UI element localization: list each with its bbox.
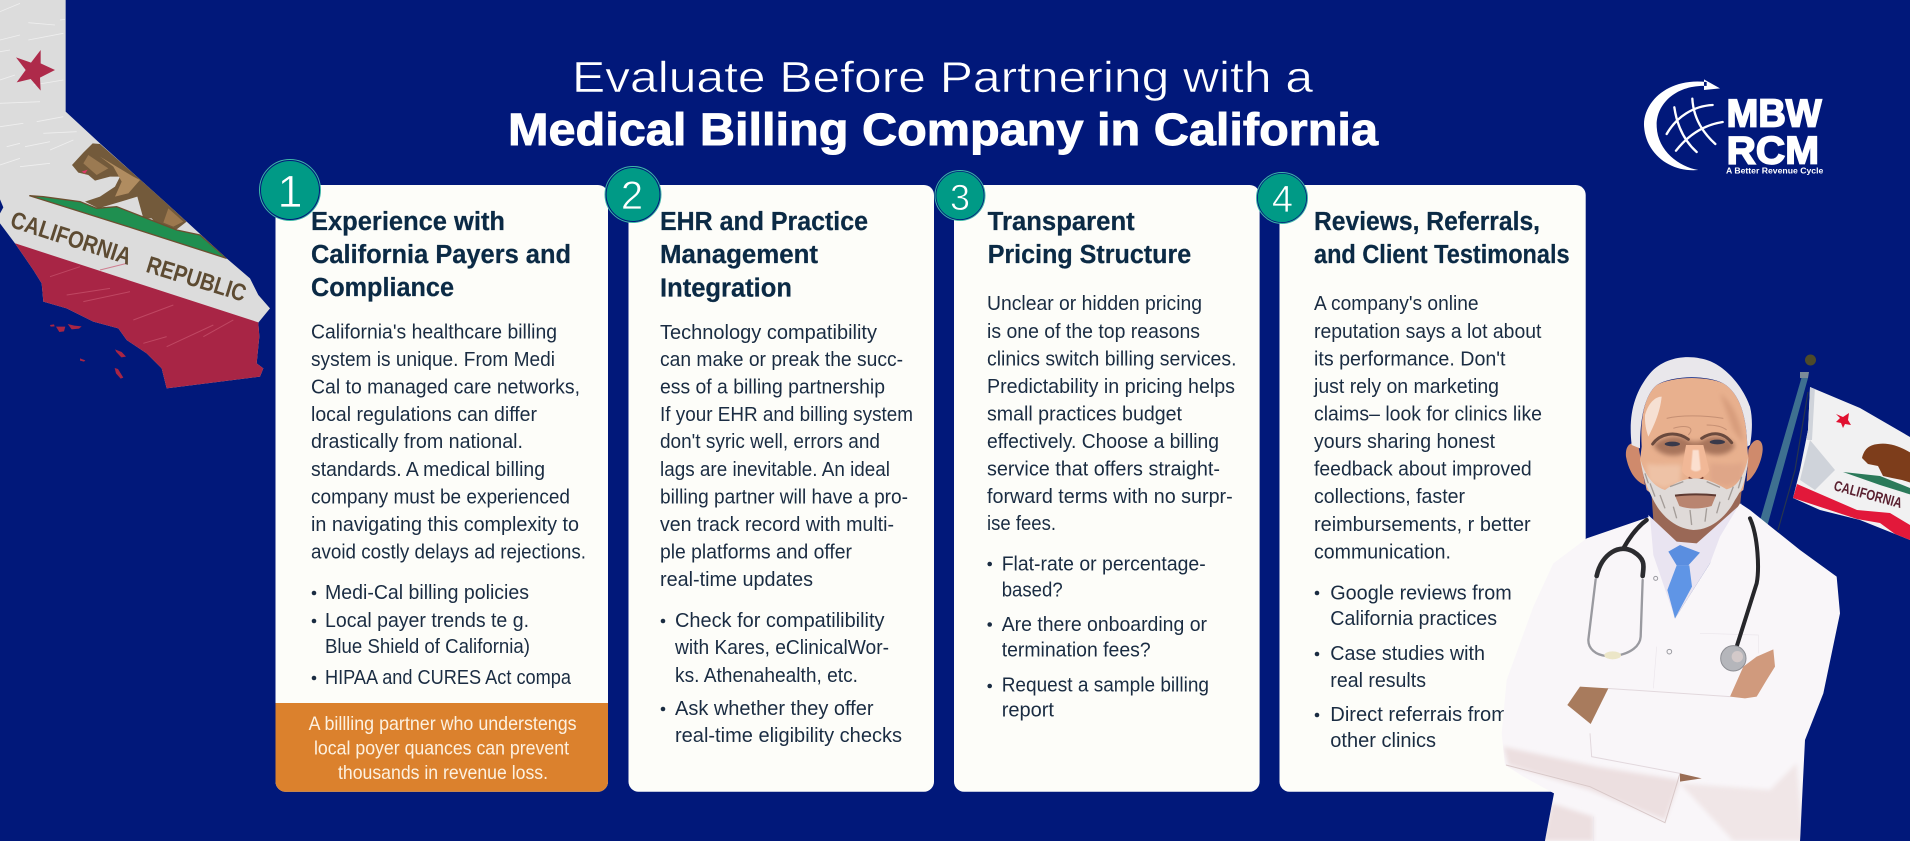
- card 1 number badge: 1: [277, 166, 303, 217]
- card 2 bullets: Ask whether they offer: [675, 697, 874, 720]
- card 4 number badge: [1256, 172, 1308, 224]
- card 2 body text: ple platforms and offer: [660, 540, 852, 564]
- card 4 body text: just rely on marketing: [1313, 375, 1499, 398]
- card 1 heading: Experience with: [311, 208, 505, 236]
- card 4 body text: [1313, 292, 1542, 564]
- card 2 bullets: Check for compatilibility: [675, 609, 885, 632]
- card 3 bullets: Are there onboarding or: [1002, 613, 1207, 636]
- card 1 body text: Cal to managed care networks,: [311, 376, 580, 398]
- card 1 body text: in navigating this complexity to: [311, 513, 579, 536]
- flag grass: [1843, 472, 1910, 496]
- card 2 body text: ven track record with multi-: [660, 513, 894, 536]
- card 4 heading: [1314, 208, 1570, 269]
- card 1 bullets: [312, 581, 572, 689]
- mouth: [1675, 494, 1716, 508]
- card 2 bullets: [661, 609, 902, 747]
- ears: [1626, 440, 1763, 485]
- card 2 bullets: with Kares, eClinicalWor-: [674, 636, 889, 659]
- flag shading: [1800, 387, 1835, 490]
- card 2 body text: real-time updates: [660, 568, 813, 591]
- card 2 body text: If your EHR and billing system: [660, 403, 913, 426]
- card 3 body text: [987, 292, 1236, 535]
- flag star: [1836, 413, 1851, 428]
- card 3 body text: service that offers straight-: [987, 458, 1220, 480]
- card 2 background: [628, 185, 934, 792]
- card 3 heading: Transparent: [988, 208, 1135, 236]
- card 1 body text: company must be experienced: [311, 486, 570, 508]
- card 1 body text: local regulations can differ: [311, 403, 537, 426]
- shirt collar: [1648, 503, 1742, 618]
- card 3 bullets: termination fees?: [1002, 638, 1151, 662]
- card 1 callout: [276, 703, 608, 792]
- card 4 body text: A company's online: [1314, 292, 1479, 315]
- forehead wrinkles: [1667, 416, 1727, 435]
- bear: [72, 143, 187, 229]
- card 1 bullets: Medi-Cal billing policies: [325, 581, 529, 604]
- banner text: [12, 212, 246, 300]
- arms and hands: [1567, 649, 1775, 782]
- flag red stripe: [1793, 484, 1910, 545]
- card 3 bullets: Request a sample billing: [1002, 674, 1209, 696]
- title: [508, 53, 1379, 155]
- card 1 body text: avoid costly delays ad rejections.: [311, 540, 586, 564]
- card 3 body text: Unclear or hidden pricing: [987, 292, 1202, 315]
- card 3 body text: small practices budget: [987, 402, 1182, 426]
- doctor: [1502, 357, 1840, 841]
- card 4 number badge: 4: [1272, 179, 1293, 221]
- card 1 callout: A billling partner who understengs: [309, 713, 577, 735]
- card 2 heading: Management: [660, 241, 819, 269]
- card 4 body text: its performance. Don't: [1314, 348, 1506, 370]
- lab coat: [1502, 503, 1840, 841]
- red stripe: [14, 243, 264, 388]
- card 2 bullets: ks. Athenahealth, etc.: [675, 664, 858, 687]
- card 1 heading: [311, 208, 571, 302]
- brows: [1653, 434, 1732, 444]
- card 2 heading: EHR and Practice: [660, 208, 868, 236]
- card 2 bullets: real-time eligibility checks: [675, 724, 902, 747]
- beard: [1641, 457, 1748, 530]
- face: [1640, 378, 1748, 527]
- coat shading: [1503, 747, 1803, 841]
- card 2: EHR integration: [605, 166, 934, 792]
- title: Medical Billing Company in California: [508, 104, 1379, 155]
- card 4 bullets: California practices: [1330, 607, 1497, 630]
- card 4 bullets: Case studies with: [1330, 642, 1485, 665]
- head: [1626, 357, 1763, 530]
- card 1 body text: California's healthcare billing: [311, 320, 557, 344]
- card 1 heading: Compliance: [311, 274, 454, 302]
- card 4 body text: reputation says a lot about: [1314, 320, 1542, 343]
- card 2 number badge: 2: [621, 174, 643, 218]
- card 3 bullets: based?: [1002, 578, 1063, 602]
- card 3 background: [954, 185, 1260, 792]
- eyes: [1665, 442, 1680, 446]
- card 2 body text: Technology compatibility: [660, 321, 878, 344]
- paper wrinkles: [0, 3, 77, 167]
- card 1 body text: standards. A medical billing: [311, 458, 545, 481]
- card 1 bullets: HIPAA and CURES Act compa: [325, 666, 572, 689]
- logo wordmark: MBW: [1727, 92, 1822, 136]
- card 2 heading: Integration: [660, 274, 792, 302]
- card 1 bullets: Local payer trends te g.: [325, 609, 529, 632]
- banner text: CALIFORNIA: [7, 207, 135, 271]
- stethoscope: [1588, 518, 1758, 671]
- islands: [50, 324, 126, 379]
- coat buttons: [1654, 576, 1672, 654]
- tie: [1667, 545, 1700, 618]
- flag pole: [1759, 354, 1816, 530]
- card 3 body text: ise fees.: [987, 512, 1056, 535]
- card 4 bullets: Google reviews from: [1330, 581, 1512, 604]
- card 3 number badge: [935, 170, 985, 220]
- card 3 heading: Pricing Structure: [988, 241, 1191, 269]
- card 1 callout: local poyer quances can prevent: [314, 738, 570, 760]
- card 1 body text: [311, 320, 586, 564]
- card 4 body text: claims– look for clinics like: [1314, 402, 1542, 426]
- card 2 body text: can make or preak the succ-: [660, 348, 903, 371]
- nose: [1682, 445, 1709, 478]
- card 2 body text: [660, 321, 913, 591]
- neck: [1652, 490, 1742, 544]
- card 2 body text: don't syric well, errors and: [660, 430, 880, 453]
- card 4 heading: Reviews, Referrals,: [1314, 208, 1540, 236]
- card 2 heading: [660, 208, 868, 302]
- card 4 body text: feedback about improved: [1314, 458, 1532, 480]
- logo crescent and arrow: [1644, 79, 1720, 170]
- logo wordmark: A Better Revenue Cycle: [1726, 165, 1824, 175]
- card 3 bullets: Flat-rate or percentage-: [1002, 552, 1206, 576]
- card 3 body text: is one of the top reasons: [987, 320, 1200, 343]
- card 1 body text: drastically from national.: [311, 430, 523, 453]
- card 1 callout: thousands in revenue loss.: [338, 762, 548, 784]
- flag bear: [1862, 444, 1910, 484]
- beard texture: [1645, 473, 1742, 525]
- logo globe lines: [1667, 99, 1723, 152]
- hair: [1631, 357, 1752, 448]
- card 4 body text: collections, faster: [1314, 485, 1465, 508]
- card 3 heading: [988, 208, 1191, 269]
- card 3 bullets: [987, 552, 1209, 722]
- card 4 body text: reimbursements, r better: [1314, 513, 1531, 536]
- card 3 body text: effectively. Choose a billing: [987, 430, 1219, 453]
- flag cloth: [1793, 387, 1910, 540]
- card 4 body text: yours sharing honest: [1314, 430, 1495, 453]
- card 3: Transparent pricing: [935, 170, 1260, 792]
- logo: MBW RCM: [1644, 79, 1824, 175]
- card 4 body text: communication.: [1314, 540, 1451, 564]
- grass: [29, 196, 227, 258]
- star: [16, 50, 55, 91]
- card 2 body text: ess of a billing partnership: [660, 376, 885, 398]
- California flag on pole: [1759, 354, 1910, 545]
- card 1: California payers: [260, 160, 608, 792]
- card 4 heading: and Client Testimonals: [1314, 241, 1570, 269]
- card 4 bullets: real results: [1330, 669, 1426, 692]
- card 2 body text: lags are inevitable. An ideal: [660, 458, 890, 481]
- card 4: Reviews and referrals: [1256, 172, 1586, 792]
- face shading: [1647, 393, 1743, 488]
- card 1 background: [276, 185, 608, 792]
- card 3 bullets: report: [1002, 698, 1054, 722]
- card 1 bullets: Blue Shield of California): [325, 635, 530, 658]
- logo wordmark: RCM: [1727, 128, 1819, 172]
- card 3 body text: forward terms with no surpr-: [987, 485, 1233, 508]
- logo wordmark: [1726, 92, 1824, 175]
- card 1 number badge: [260, 160, 320, 220]
- banner text: REPUBLIC: [143, 252, 249, 307]
- card 4 bullets: [1315, 581, 1512, 752]
- card 4 bullets: other clinics: [1330, 729, 1436, 752]
- card 3 number badge: 3: [950, 177, 970, 218]
- card 2 body text: billing partner will have a pro-: [660, 486, 908, 508]
- card 1 body text: system is unique. From Medi: [311, 348, 555, 371]
- title: Evaluate Before Partnering with a: [572, 53, 1314, 102]
- card 3 body text: Predictability in pricing helps: [987, 375, 1235, 398]
- card 4 background: [1280, 185, 1586, 792]
- card 1 heading: California Payers and: [311, 241, 571, 269]
- card 4 bullets: Direct referrais from: [1330, 703, 1508, 726]
- card 2 number badge: [605, 166, 661, 222]
- card 3 body text: clinics switch billing services.: [987, 348, 1236, 370]
- California state flag map: [0, 0, 277, 400]
